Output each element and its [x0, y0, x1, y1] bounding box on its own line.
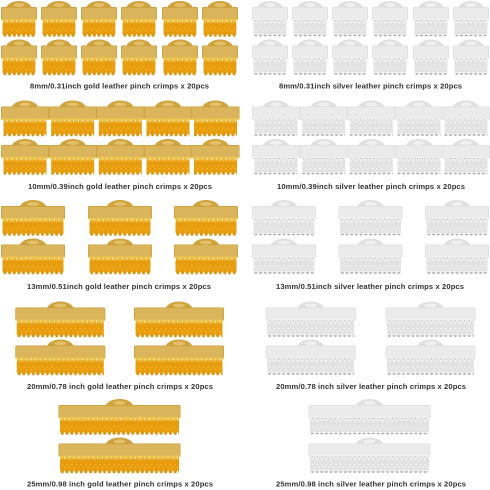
silver 13mm crimp grid — [252, 200, 489, 274]
gold 10mm crimp grid — [1, 100, 240, 175]
caption: silver 25mm: 25mm/0.98 inch silver leather pinch crimps x 20pcs — [276, 480, 466, 488]
caption: gold 10mm: 10mm/0.39inch gold leather pinch crimps x 20pcs — [28, 182, 212, 191]
panel: silver 20mm crimps — [266, 302, 475, 391]
caption: gold 25mm: 25mm/0.98 inch gold leather pinch crimps x 20pcs — [27, 480, 213, 488]
caption: silver 20mm: 20mm/0.78 inch silver leather pinch crimps x 20pcs — [276, 382, 466, 391]
panel: silver 25mm crimps — [276, 399, 466, 488]
caption: gold 20mm: 20mm/0.78 inch gold leather pinch crimps x 20pcs — [27, 382, 213, 391]
panel: gold 25mm crimps — [27, 399, 213, 488]
caption: silver 10mm: 10mm/0.39inch silver leather pinch crimps x 20pcs — [277, 182, 465, 191]
caption: silver 13mm: 13mm/0.51inch silver leather pinch crimps x 20pcs — [276, 282, 464, 291]
gold 8mm crimp grid — [1, 1, 238, 76]
panel: silver 10mm crimps — [252, 100, 490, 191]
panel: gold 10mm crimps — [1, 100, 240, 191]
panel: gold 13mm crimps — [1, 200, 238, 291]
silver 20mm crimp grid — [266, 302, 475, 376]
panel: gold 8mm crimps — [1, 1, 238, 90]
panel: gold 20mm crimps — [15, 302, 224, 391]
caption: gold 13mm: 13mm/0.51inch gold leather pinch crimps x 20pcs — [27, 282, 211, 291]
caption: silver 8mm: 8mm/0.31inch silver leather pinch crimps x 20pcs — [279, 82, 462, 90]
gold 13mm crimp grid — [1, 200, 238, 274]
panel: silver 8mm crimps — [252, 1, 489, 90]
silver 25mm crimp stack — [309, 399, 430, 474]
silver 8mm crimp grid — [252, 1, 489, 76]
panel: silver 13mm crimps — [252, 200, 489, 291]
gold 25mm crimp stack — [58, 399, 180, 474]
silver 10mm crimp grid — [252, 100, 490, 175]
gold 20mm crimp grid — [15, 302, 224, 376]
caption: gold 8mm: 8mm/0.31inch gold leather pinch crimps x 20pcs — [30, 82, 209, 90]
